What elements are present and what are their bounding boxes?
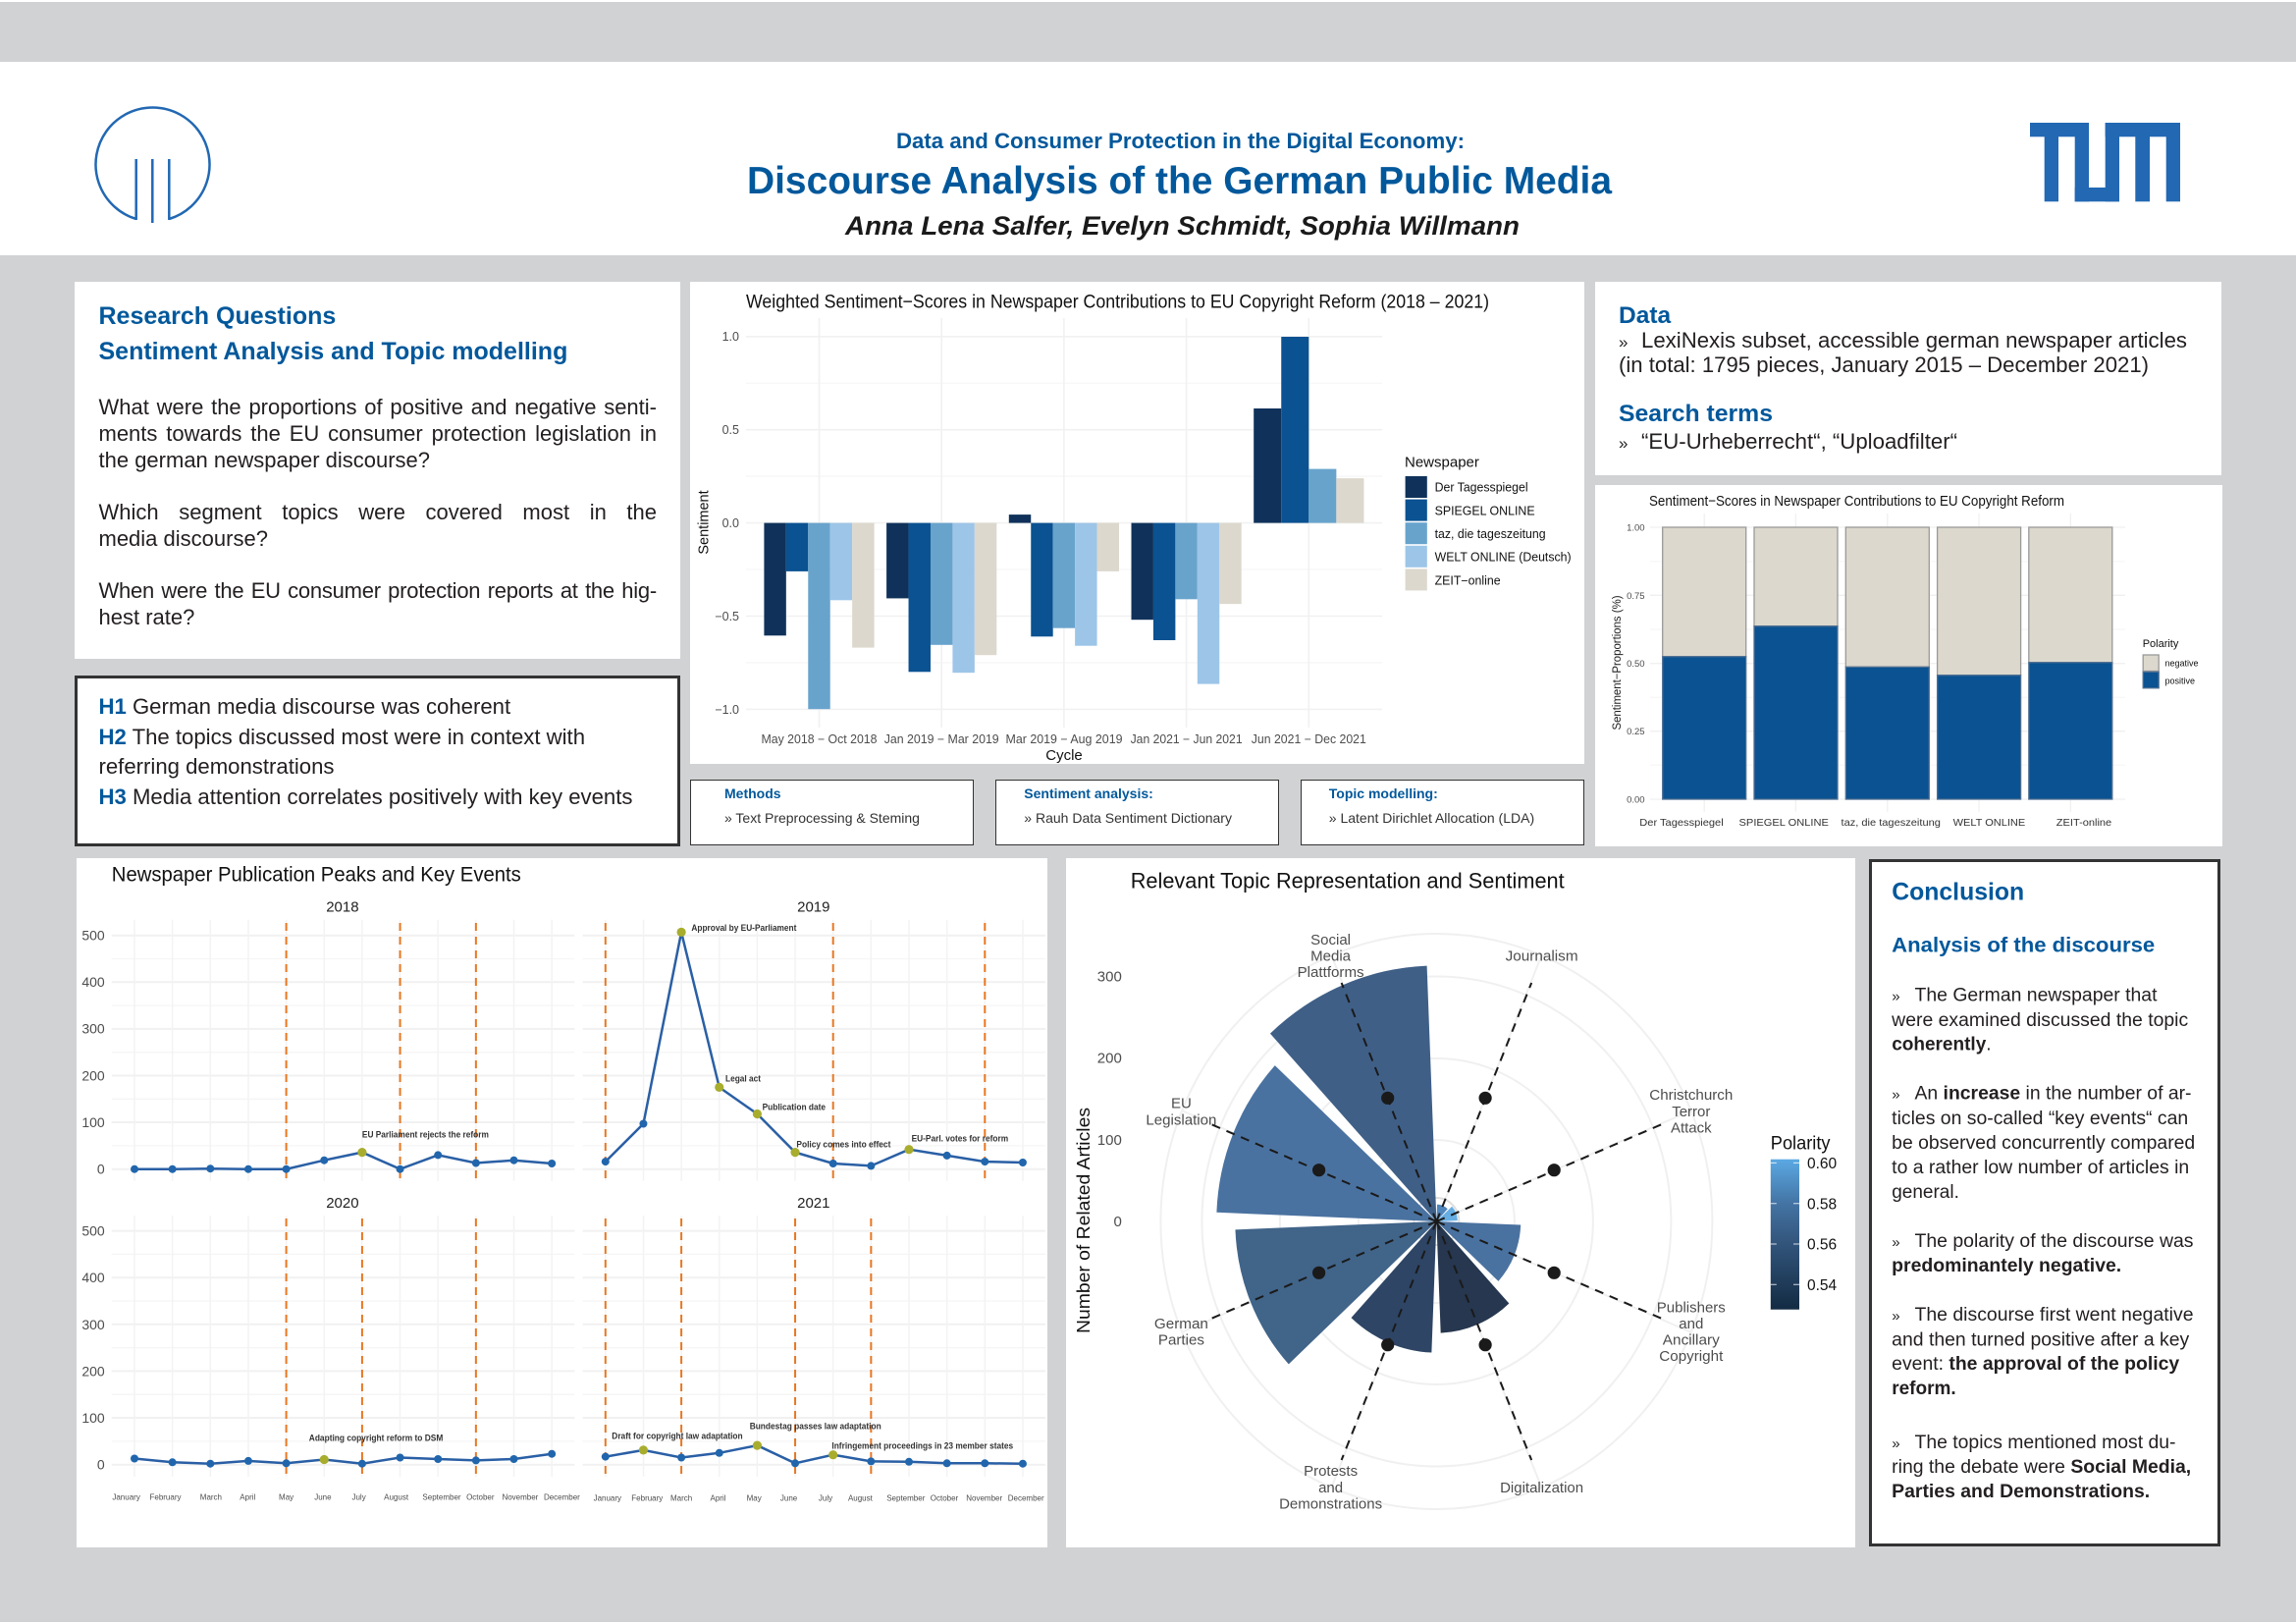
bar: publishers and ancillary copyright	[1436, 1221, 1521, 1281]
finding 2: be observed concurrently compared	[1892, 1133, 2195, 1154]
legend: polarity: positive	[2165, 676, 2195, 685]
facet: 2020: March	[200, 1492, 222, 1501]
x axis labels: May 2018 − Oct 2018	[762, 732, 878, 746]
legend: polarity gradient: 0.56	[1807, 1237, 1837, 1254]
finding 3: The polarity of the discourse was	[1914, 1231, 2193, 1252]
heading: analysis of the discourse: Analysis of the discourse	[1892, 935, 2155, 956]
facet: 2021: November	[966, 1493, 1002, 1502]
bars: May 2018 to Oct 2018	[764, 523, 875, 709]
y axis labels: 0.50	[1627, 659, 1645, 670]
stacked bars	[1663, 527, 2112, 799]
facet: 2018	[131, 899, 556, 1173]
question 3: When were the EU consumer protection reports at the hig-	[98, 578, 657, 603]
facet: 2021: March	[670, 1493, 692, 1502]
finding 5: The topics mentioned most du-	[1914, 1433, 2175, 1453]
headline: subtitle: Data and Consumer Protection in the Digital Economy:	[896, 129, 1465, 153]
legend: polarity: Polarity	[2143, 638, 2179, 650]
facet: 2020: Adapting copyright reform to DSM	[309, 1432, 443, 1442]
question 1: ments towards the EU consumer protection legislation in	[98, 421, 657, 446]
finding 1: coherently.	[1892, 1035, 1992, 1055]
facet: 2020	[112, 1195, 580, 1501]
topic labels	[1146, 932, 1733, 1512]
radial axis labels: 200	[1097, 1051, 1122, 1066]
facet: 2019: Approval by EU-Parliament	[691, 922, 796, 933]
panel: sentiment proportions stacked bars	[1595, 485, 2222, 846]
question 3: hest rate?	[98, 605, 194, 629]
y axis labels: −1.0	[715, 703, 739, 717]
x axis labels	[762, 732, 1366, 746]
facet: 2020: November	[502, 1492, 539, 1501]
bar: digitalization	[1436, 1221, 1509, 1333]
facet: 2020: 2020	[326, 1195, 359, 1212]
heading: methods: Methods	[724, 785, 781, 801]
facet: 2021: Draft for copyright law adaptation	[612, 1430, 743, 1440]
facet: 2020: June	[314, 1492, 332, 1501]
text: LDA: » Latent Dirichlet Allocation (LDA)	[1329, 810, 1534, 826]
hypothesis 2: referring demonstrations	[98, 754, 334, 779]
facet: 2021: Infringement proceedings in 23 member states	[831, 1439, 1013, 1450]
finding 2	[1892, 1084, 2195, 1203]
y axis labels: 1.00	[1627, 522, 1645, 534]
finding 2: An increase in the number of ar-	[1914, 1084, 2191, 1104]
hypothesis 2: H2 The topics discussed most were in context with	[98, 725, 585, 748]
panel: data and search terms	[1595, 282, 2221, 475]
topic labels: Copyright	[1659, 1348, 1724, 1365]
facet: 2021: June	[780, 1493, 798, 1502]
y axis labels	[1627, 522, 1645, 805]
topic labels: Attack	[1671, 1120, 1712, 1137]
question 3	[98, 578, 657, 629]
chart title: Relevant Topic Representation and Sentiment	[1131, 868, 1565, 893]
topic labels: Christchurch	[1649, 1087, 1733, 1104]
heading: search terms: Search terms	[1619, 401, 1773, 427]
y axis labels: top row: 100	[81, 1114, 105, 1130]
topic labels: Ancillary	[1663, 1331, 1720, 1348]
topic labels: Demonstrations	[1279, 1495, 1382, 1512]
x axis labels: ZEIT-online	[2056, 817, 2111, 829]
finding 4: event: the approval of the policy	[1892, 1354, 2180, 1375]
facet: 2020: August	[384, 1492, 409, 1501]
topic labels: and	[1318, 1480, 1343, 1496]
finding 5: ring the debate were Social Media,	[1892, 1457, 2191, 1478]
x axis labels: Mar 2019 − Aug 2019	[1005, 732, 1123, 746]
legend: polarity gradient: 0.58	[1807, 1196, 1837, 1213]
panel: weighted sentiment bar chart	[690, 282, 1584, 764]
y axis labels: top row: 200	[81, 1067, 105, 1083]
facet: 2020: May	[279, 1492, 294, 1501]
finding 4: reform.	[1892, 1379, 1956, 1399]
finding 2: general.	[1892, 1182, 1959, 1203]
y axis labels: top row: 500	[81, 928, 105, 944]
topic labels: German	[1154, 1316, 1208, 1332]
topic labels: Publishers	[1657, 1299, 1726, 1316]
x axis labels	[1639, 817, 2111, 829]
y axis labels: bottom row: 300	[81, 1317, 105, 1332]
facet: 2020: October	[466, 1492, 495, 1501]
y axis labels: bottom row: 200	[81, 1363, 105, 1379]
facet: 2021: May	[747, 1493, 762, 1502]
finding 3: predominantely negative.	[1892, 1256, 2121, 1276]
facet: 2019	[602, 899, 1027, 1169]
panel: publication peaks and key events	[77, 858, 1047, 1547]
finding 4	[1892, 1305, 2193, 1399]
facet: 2020: September	[422, 1492, 461, 1501]
facet: 2019: EU-Parl. votes for reform	[912, 1133, 1008, 1144]
facet: 2019: 2019	[797, 899, 829, 916]
facet: 2021: February	[631, 1493, 663, 1502]
finding 5: Parties and Demonstrations.	[1892, 1482, 2150, 1502]
heading: data: Data	[1619, 302, 1671, 329]
heading: sentiment analysis: Sentiment analysis:	[1024, 785, 1153, 801]
facet: 2021: September	[886, 1493, 926, 1502]
y axis labels: top row: 300	[81, 1021, 105, 1037]
heading: conclusion: Conclusion	[1892, 878, 2024, 905]
x axis labels: Jun 2021 − Dec 2021	[1252, 732, 1366, 746]
radial axis labels	[1097, 968, 1122, 1230]
facet: 2021	[594, 1195, 1044, 1502]
finding 1: The German newspaper that	[1914, 986, 2158, 1005]
topic labels: Media	[1310, 947, 1352, 964]
bar: protests and demonstrations	[1352, 1221, 1436, 1353]
topic labels: Journalism	[1506, 947, 1578, 964]
y axis title: Sentiment	[697, 490, 713, 555]
facet: 2021: Bundestag passes law adaptation	[750, 1421, 881, 1432]
top white hairline	[0, 0, 2296, 2]
topic labels: EU	[1171, 1095, 1192, 1111]
finding 1: were examined discussed the topic	[1891, 1010, 2188, 1031]
finding 1	[1891, 986, 2188, 1055]
y axis labels: 0.75	[1627, 591, 1645, 602]
legend: polarity gradient: 0.54	[1807, 1277, 1838, 1294]
finding 4: The discourse first went negative	[1914, 1305, 2193, 1326]
radial axis labels: 300	[1097, 968, 1122, 985]
header band	[0, 62, 2296, 255]
facet: 2019: Legal act	[725, 1073, 761, 1084]
y axis labels: 0.5	[722, 423, 739, 437]
text: data description: (in total: 1795 pieces, January 2015 – December 2021)	[1619, 352, 2149, 377]
panel: topic representation polar chart	[1066, 858, 1855, 1547]
y axis labels: bottom row: 0	[97, 1457, 105, 1473]
legend: newspaper: taz, die tageszeitung	[1435, 527, 1546, 541]
facet: 2018: EU Parliament rejects the reform	[362, 1129, 489, 1139]
text: search terms: »	[1619, 434, 1628, 453]
authors: Anna Lena Salfer, Evelyn Schmidt, Sophia Willmann	[844, 211, 1520, 241]
facet: 2020: February	[149, 1492, 182, 1501]
x axis labels: WELT ONLINE	[1953, 817, 2025, 829]
text: preprocessing: » Text Preprocessing & Steming	[724, 810, 920, 826]
legend: newspaper	[1405, 454, 1572, 590]
bar: german parties	[1235, 1221, 1436, 1364]
chart title: Sentiment−Scores in Newspaper Contributions to EU Copyright Reform	[1649, 494, 2064, 510]
finding 5	[1892, 1433, 2191, 1502]
title: Discourse Analysis of the German Public Media	[747, 160, 1612, 202]
text: data description	[1619, 328, 2187, 377]
legend: polarity gradient: 0.60	[1807, 1156, 1838, 1172]
finding 1: »	[1892, 988, 1900, 1005]
x axis labels: Jan 2021 − Jun 2021	[1131, 732, 1243, 746]
question 2: media discourse?	[98, 526, 268, 551]
legend: polarity gradient	[1771, 1134, 1838, 1310]
facet: 2021: January	[594, 1493, 621, 1502]
x axis labels: Der Tagesspiegel	[1639, 817, 1724, 829]
text: data description: »	[1619, 333, 1628, 352]
x axis labels: taz, die tageszeitung	[1842, 817, 1941, 829]
finding 3	[1892, 1231, 2193, 1276]
bar: christchurch terror attack	[1436, 1207, 1458, 1221]
x axis labels: SPIEGEL ONLINE	[1739, 817, 1829, 829]
bar: social media platforms	[1270, 966, 1436, 1221]
legend: newspaper: WELT ONLINE (Deutsch)	[1435, 550, 1572, 564]
heading: research questions: Research Questions	[98, 302, 336, 330]
radial axis labels: 100	[1097, 1132, 1122, 1149]
question 1	[98, 395, 657, 472]
panel: sentiment analysis method	[995, 780, 1279, 845]
facet: 2021: December	[1008, 1493, 1044, 1502]
topic labels: Legislation	[1146, 1111, 1216, 1128]
finding 2: ticles on so-called “key events“ can	[1892, 1109, 2188, 1129]
y axis labels: 1.0	[722, 330, 739, 344]
text: dictionary: » Rauh Data Sentiment Dictionary	[1024, 810, 1232, 826]
text: search terms: “EU-Urheberrecht“, “Uploadfilter“	[1641, 429, 1957, 454]
panel: conclusion	[1869, 859, 2220, 1546]
icon: TUM logo	[2030, 123, 2180, 201]
key event markers	[287, 923, 985, 1477]
y axis labels	[715, 330, 739, 717]
topic labels: Terror	[1672, 1104, 1710, 1120]
y axis labels: top row	[81, 928, 105, 1177]
chart title: Newspaper Publication Peaks and Key Events	[112, 864, 521, 887]
facet: 2021: July	[819, 1493, 832, 1502]
panel: methods	[690, 780, 974, 845]
finding 4: and then turned positive after a key	[1892, 1329, 2190, 1350]
legend: polarity: negative	[2165, 658, 2199, 668]
finding 4: »	[1892, 1308, 1900, 1325]
y axis labels: bottom row	[81, 1222, 105, 1473]
y axis title: Sentiment−Proportions (%)	[1612, 595, 1624, 731]
facet: 2020: April	[240, 1492, 256, 1501]
y axis labels: bottom row: 500	[81, 1222, 105, 1238]
y axis labels: 0.0	[722, 516, 739, 530]
bar: journalism	[1436, 1205, 1448, 1221]
radial axis labels: 0	[1113, 1214, 1122, 1230]
text: data description: LexiNexis subset, accessible german newspaper articles	[1641, 328, 2187, 352]
polar bars by topic	[1216, 966, 1521, 1364]
topic labels: Plattforms	[1298, 964, 1364, 981]
heading: sentiment analysis and topic modelling: Sentiment Analysis and Topic modelling	[98, 338, 567, 365]
topic labels: Social	[1310, 932, 1351, 948]
question 1: What were the proportions of positive and negative senti-	[98, 395, 657, 419]
facet: 2021: April	[710, 1493, 726, 1502]
facet: 2020: January	[112, 1492, 140, 1501]
bars: Mar 2019 to Aug 2019	[1009, 514, 1119, 646]
facet: 2021: October	[931, 1493, 959, 1502]
finding 2: »	[1892, 1086, 1900, 1104]
panel: hypotheses	[75, 676, 680, 846]
legend: polarity	[2143, 638, 2199, 688]
hypothesis 3: H3 Media attention correlates positively with key events	[98, 784, 632, 809]
y axis labels: top row: 0	[97, 1162, 105, 1177]
y axis labels: −0.5	[715, 610, 739, 623]
topic labels: Protests	[1304, 1463, 1358, 1480]
facet: 2018: 2018	[326, 899, 359, 916]
topic labels: Digitalization	[1500, 1480, 1583, 1496]
x axis labels: Jan 2019 − Mar 2019	[884, 732, 999, 746]
finding 5: »	[1892, 1435, 1900, 1452]
icon: university seal logo	[96, 107, 210, 223]
topic labels: and	[1679, 1316, 1703, 1332]
facet: 2021: August	[848, 1493, 874, 1502]
panel: topic modelling method	[1301, 780, 1584, 845]
dashed spokes and dots	[1208, 983, 1664, 1460]
legend: polarity gradient: Polarity	[1771, 1134, 1831, 1155]
y axis labels: bottom row: 400	[81, 1270, 105, 1285]
y axis title: Number of Related Articles	[1073, 1108, 1094, 1333]
heading: topic modelling: Topic modelling:	[1329, 785, 1438, 801]
legend: newspaper: SPIEGEL ONLINE	[1435, 505, 1535, 518]
question 2	[98, 500, 657, 551]
bars: Jan 2019 to Mar 2019	[886, 523, 996, 673]
y axis labels: bottom row: 100	[81, 1410, 105, 1426]
y axis labels: 0.00	[1627, 795, 1645, 805]
bottom white hairline	[0, 1622, 2296, 1624]
chart title: Weighted Sentiment−Scores in Newspaper Contributions to EU Copyright Reform (2018 – 2021)	[746, 291, 1489, 312]
hypothesis 2	[98, 725, 585, 779]
y axis labels: 0.25	[1627, 727, 1645, 737]
x axis title: Cycle	[1045, 747, 1083, 764]
bars: Jan 2021 to Jun 2021	[1131, 523, 1242, 684]
finding 3: »	[1892, 1234, 1900, 1251]
bar: EU legislation	[1216, 1065, 1436, 1221]
facet: 2019: Policy comes into effect	[796, 1139, 890, 1150]
question 1: the german newspaper discourse?	[98, 448, 430, 472]
facet: 2020: July	[351, 1492, 366, 1501]
finding 2: to a rather low number of articles in	[1892, 1158, 2189, 1178]
bars: Jun 2021 to Dec 2021	[1254, 337, 1363, 523]
question 2: Which segment topics were covered most in the	[98, 500, 657, 524]
facet: 2021: 2021	[797, 1195, 829, 1212]
panel: research questions	[75, 282, 680, 659]
hypothesis 1: H1 German media discourse was coherent	[98, 694, 510, 719]
legend: newspaper: Newspaper	[1405, 454, 1479, 471]
legend: newspaper: Der Tagesspiegel	[1435, 481, 1528, 495]
topic labels: Parties	[1158, 1331, 1204, 1348]
facet: 2019: Publication date	[763, 1102, 826, 1112]
legend: newspaper: ZEIT−online	[1435, 573, 1501, 587]
y axis labels: top row: 400	[81, 974, 105, 990]
facet: 2020: December	[544, 1492, 580, 1501]
